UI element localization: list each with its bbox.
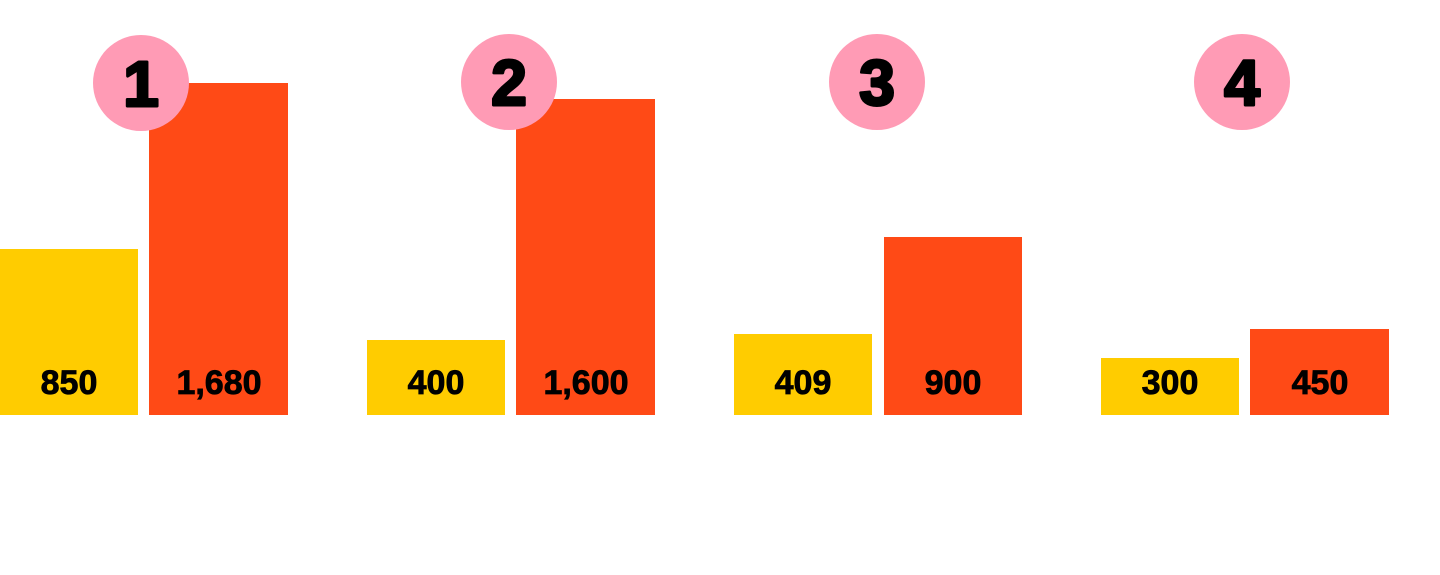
bar: 1 yellow	[0, 249, 138, 415]
bar: 2 yellow	[367, 340, 505, 415]
bar: 3 orange: 900	[925, 364, 981, 402]
bar: 4 yellow	[1101, 358, 1239, 415]
group 4	[1101, 34, 1389, 415]
bar: 3 yellow: 409	[775, 364, 831, 402]
group 2	[367, 34, 655, 415]
group 1	[0, 35, 288, 415]
bar: 1 orange: 1,680	[176, 364, 262, 402]
bar: 4 orange: 450	[1292, 364, 1348, 402]
bar: 1 yellow: 850	[41, 364, 97, 402]
bar: 2 orange	[516, 99, 655, 415]
bar: 1 orange	[149, 83, 288, 415]
badge 3	[829, 34, 925, 130]
badge 4	[1194, 34, 1290, 130]
badge 4: 4	[1224, 47, 1260, 119]
badge 1	[93, 35, 189, 131]
bar: 4 orange	[1250, 329, 1389, 415]
bar: 3 orange	[884, 237, 1022, 415]
badge 3: 3	[859, 47, 895, 119]
bar: 2 yellow: 400	[408, 364, 464, 402]
group 3	[734, 34, 1022, 415]
badge 1: 1	[123, 48, 159, 120]
badge 2	[461, 34, 557, 130]
badge 2: 2	[491, 47, 527, 119]
bar: 2 orange: 1,600	[543, 364, 629, 402]
bar: 4 yellow: 300	[1142, 364, 1198, 402]
bar: 3 yellow	[734, 334, 872, 415]
